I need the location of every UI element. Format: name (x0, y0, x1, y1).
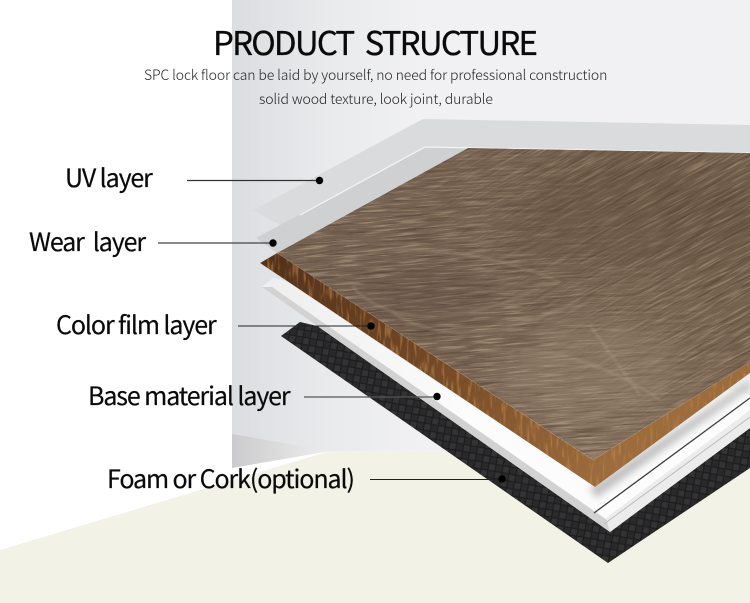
subtitle line 1: SPC lock floor can be laid by yourself, no need for professional construction (144, 65, 607, 85)
leader: base material layer (304, 393, 441, 400)
label: base material layer: Base material layer (88, 377, 290, 413)
subtitle line 2: solid wood texture, look joint, durable (259, 89, 493, 109)
wall background (232, 0, 750, 468)
label: UV layer: UV layer (65, 159, 152, 195)
layer: foam or cork (281, 322, 750, 563)
leader: color film layer (238, 322, 375, 330)
layer: UV (253, 119, 750, 236)
title: PRODUCT STRUCTURE (213, 17, 536, 65)
layer: wear (256, 147, 750, 253)
label: color film layer: Color film layer (56, 306, 216, 342)
layer: base material (262, 278, 750, 532)
leader: foam or cork (370, 475, 506, 483)
label: foam or cork: Foam or Cork(optional) (107, 460, 354, 496)
leader: UV layer (187, 177, 323, 184)
layer: wood surface (277, 148, 750, 460)
floor (0, 450, 750, 603)
leader: wear layer (158, 239, 277, 247)
layer: color film edge (260, 253, 750, 487)
label: wear layer: Wear layer (29, 223, 145, 259)
